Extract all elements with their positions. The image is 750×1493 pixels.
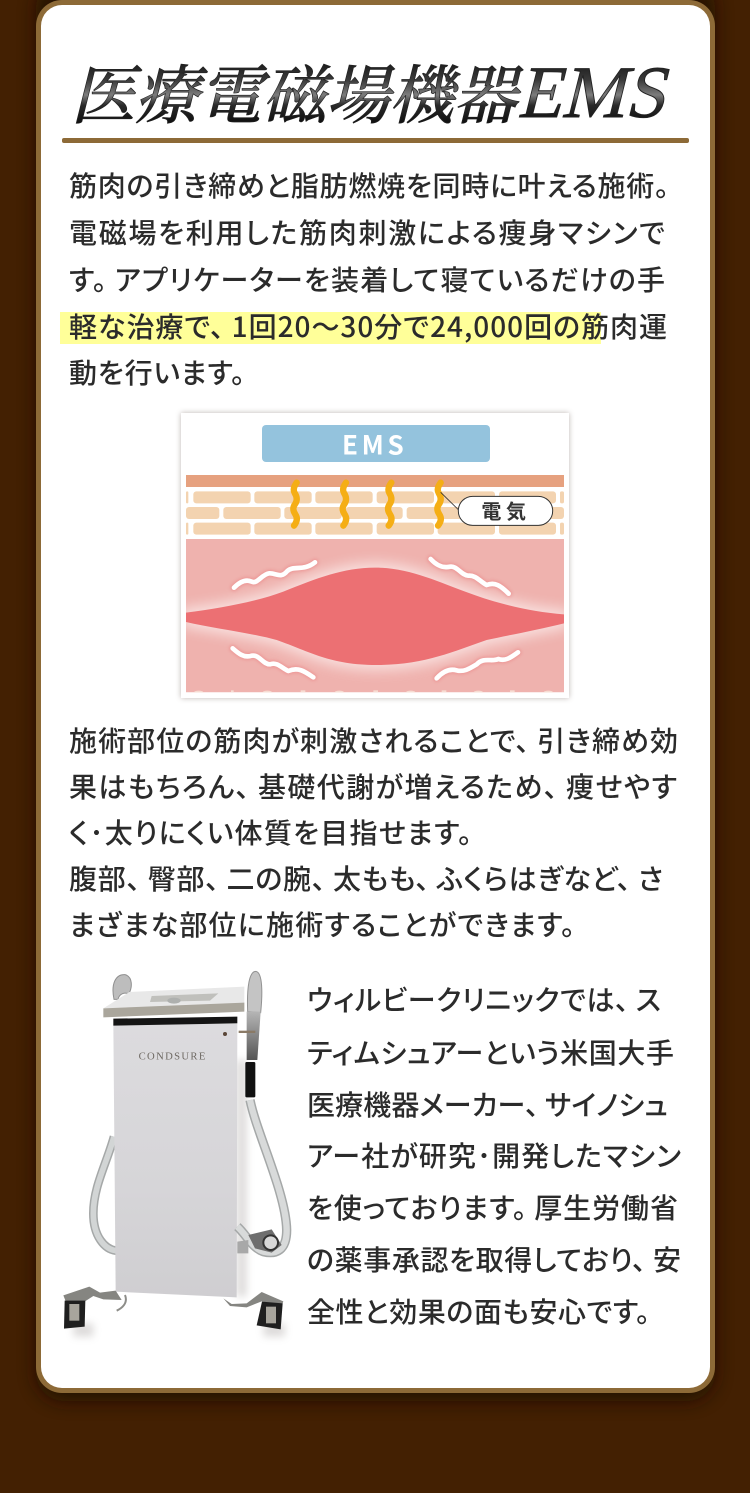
text block: machine description: 医療機器メーカー、 サイノシュ (307, 1084, 668, 1124)
right foot (223, 1292, 283, 1329)
right hose (237, 1100, 287, 1253)
text block: intro: 動を行います。 (69, 352, 245, 392)
EMS label (262, 425, 490, 462)
machine shadow (73, 1060, 285, 1337)
highlight (60, 312, 601, 344)
text block: benefits: く･太りにくい体質を目指せます。 (69, 812, 472, 852)
callout: electricity (441, 492, 553, 525)
text block: intro: 電磁場を利用した筋肉刺激による痩身マシンで (69, 212, 665, 252)
panel: EMS diagram (181, 413, 569, 698)
left foot (63, 1287, 126, 1329)
EMS label: EMS (342, 425, 407, 462)
callout: electricity: 電気 (481, 496, 531, 525)
text block: machine description (307, 979, 682, 1331)
muscle layer (186, 539, 564, 694)
wave lines (233, 559, 518, 678)
text block: machine description: アー社が研究･開発したマシン (307, 1135, 682, 1175)
electricity squiggles (293, 483, 441, 526)
text block: benefits: 腹部、 臀部、 二の腕、 太もも、 ふくらはぎなど、 さ (69, 858, 663, 898)
text block: machine description: ティムシュアーという米国大手 (307, 1032, 674, 1072)
title underline (62, 138, 689, 143)
left hose (93, 1137, 116, 1251)
text block: machine description: の薬事承認を取得しており、 安 (307, 1239, 681, 1279)
text block: benefits (69, 720, 678, 944)
text block: machine description: を使っております。 厚生労働省 (307, 1187, 678, 1227)
brand logo: CONDSURE (139, 1051, 207, 1062)
tray (103, 987, 244, 1026)
title: 医療電磁場機器 (66, 44, 535, 137)
left handle (113, 975, 131, 999)
text block: intro (60, 165, 669, 392)
text block: benefits: 果はもちろん、 基礎代謝が増えるため、 痩せやす (69, 766, 677, 806)
title: EMS (513, 52, 680, 134)
illustration: EMS machine (63, 971, 287, 1337)
text block: intro: す。 アプリケーターを装着して寝ているだけの手 (69, 259, 665, 299)
text block: benefits: 施術部位の筋肉が刺激されることで、 引き締め効 (69, 720, 678, 760)
skin layer (186, 475, 564, 535)
text block: machine description: ウィルビークリニックでは、 ス (307, 979, 661, 1019)
hose applicator (237, 1229, 282, 1253)
text block: intro: 筋肉の引き締めと脂肪燃焼を同時に叶える施術。 (69, 165, 669, 205)
cabinet (113, 1024, 237, 1297)
text block: benefits: まざまな部位に施術することができます。 (69, 904, 575, 944)
text block: machine description: 全性と効果の面も安心です。 (307, 1291, 650, 1331)
text block: intro: 軽な治療で、 1回20～30分で24,000回の筋肉運 (69, 306, 667, 346)
right applicator holder (239, 971, 262, 1097)
contracted muscle (186, 568, 564, 665)
